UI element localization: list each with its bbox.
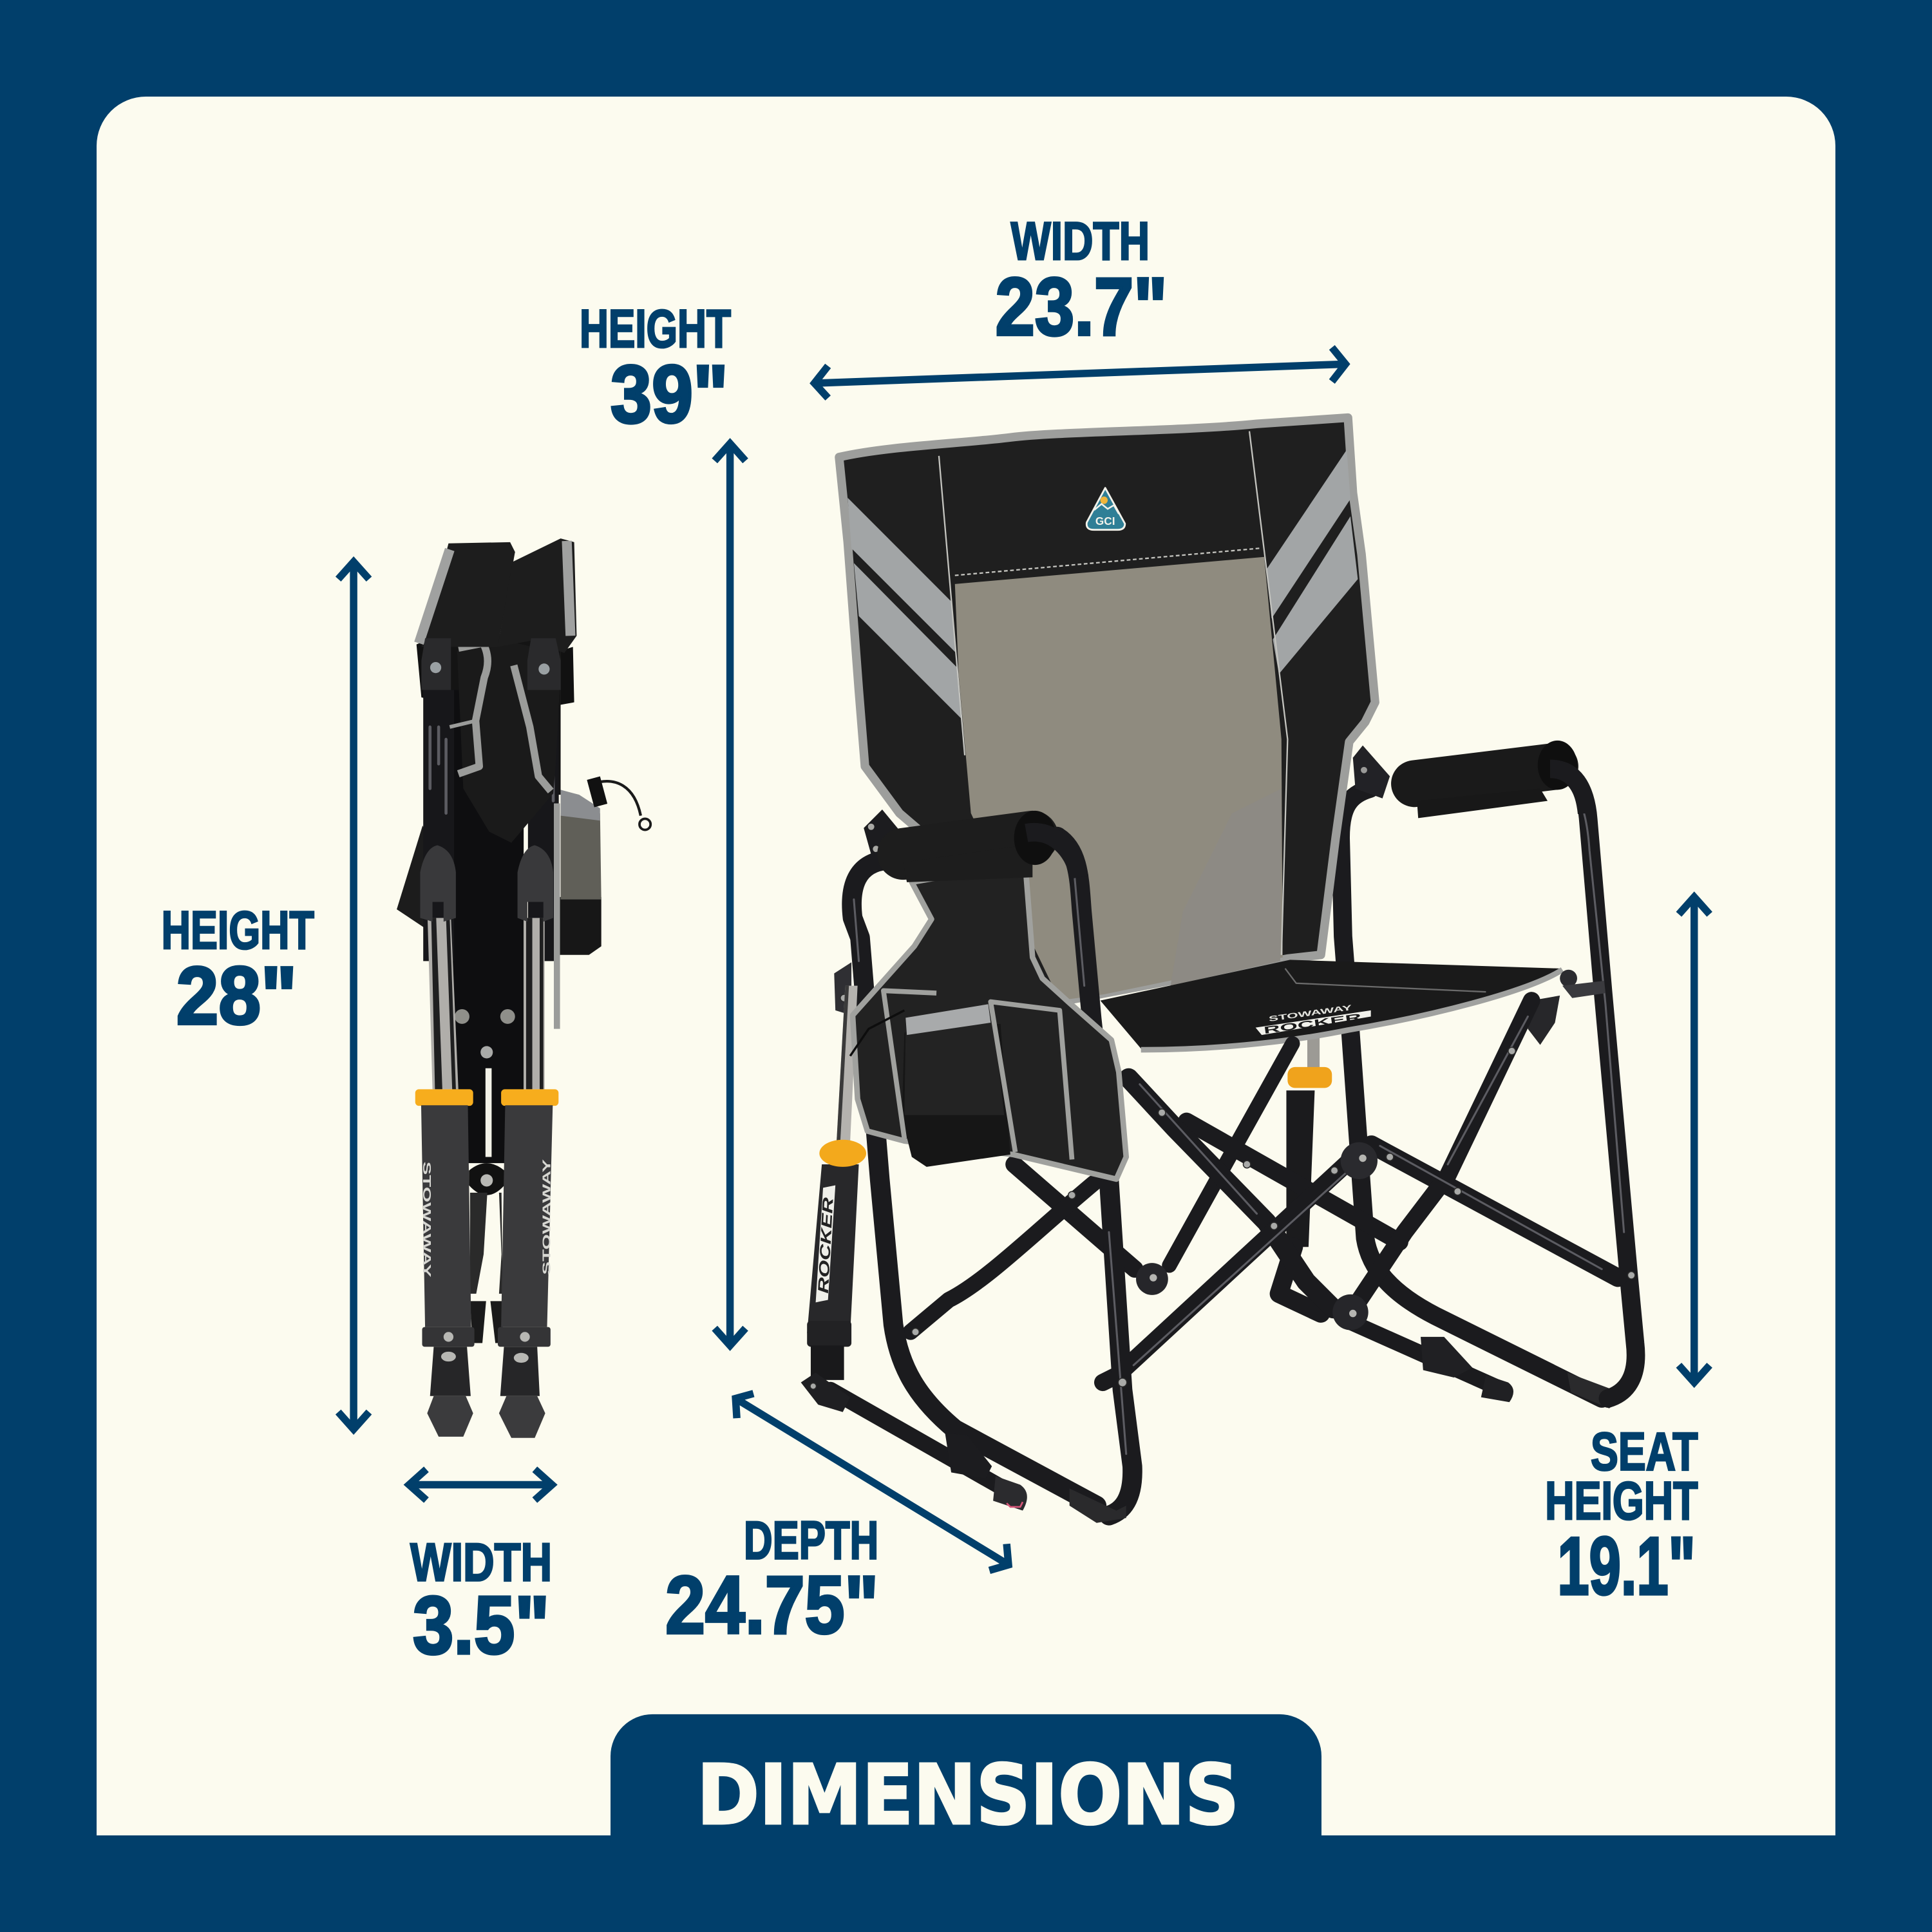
folded chair: left cylinder <box>421 1105 471 1327</box>
folded chair: tube highlights <box>430 727 553 813</box>
folded chair: right gray binding <box>567 541 571 636</box>
arrow: depth <box>735 1394 1009 1570</box>
label: top width <box>996 211 1168 352</box>
folded chair: right arched tube <box>535 690 551 961</box>
chair: seams <box>939 431 1287 955</box>
folded chair: right collar <box>498 1327 551 1347</box>
folded chair: right cylinder: STOWAWAY <box>540 1159 553 1275</box>
chair: front cylinder collar <box>807 1321 851 1347</box>
folded chair: left top fabric <box>421 542 515 647</box>
chair: seat fabric <box>1101 960 1560 1048</box>
heading: dimensions: DIMENSIONS <box>697 1748 1239 1844</box>
chair: back fabric with binding <box>839 418 1375 1004</box>
chair: right arm pad <box>1414 741 1587 818</box>
folded chair: left chrome tube <box>428 918 459 1089</box>
chair: pouch band <box>905 1004 990 1035</box>
value: depth: 24.75" <box>665 1559 878 1651</box>
chair: front right leg <box>1057 837 1132 1515</box>
folded chair: right yellow collar <box>501 1089 558 1106</box>
folded chair: left gray cap <box>420 845 456 922</box>
chair: right rear runner foot <box>1567 1372 1627 1408</box>
label: depth <box>665 1510 878 1651</box>
chair: seat corner knob and bracket <box>1528 970 1605 1045</box>
folded chair: left arched tube <box>431 690 447 961</box>
arrow: open height <box>715 444 746 1345</box>
chair: side organizer panel <box>853 862 1126 1179</box>
chair: frame bolts <box>912 1047 1635 1336</box>
chair: cup pouch <box>902 1024 1010 1167</box>
label: open height <box>580 299 731 440</box>
arrow: folded height <box>338 562 369 1429</box>
chair: right hinge <box>1353 746 1390 799</box>
chair: knob on leg <box>834 962 851 1016</box>
folded chair: right cylinder <box>501 1105 553 1327</box>
chair: front cylinder hinge and foot <box>801 1345 850 1412</box>
folded chair: center black frame <box>417 634 574 1343</box>
chair: rocker label: ROCKER <box>815 1197 837 1294</box>
folded chair: left chrome shade <box>431 918 456 1089</box>
folded chair: left collar <box>422 1327 475 1347</box>
chair: left reflective stripes <box>848 498 962 719</box>
label: depth: DEPTH <box>744 1510 878 1570</box>
chair: rocker label <box>815 1186 837 1302</box>
chair: yellow collar <box>819 1140 866 1167</box>
folded chair: left bracket <box>421 638 451 690</box>
chair: right reflective stripes <box>1267 450 1358 674</box>
chair: right tube highlight <box>1577 795 1624 1232</box>
folded chair: left cylinder: STOWAWAY <box>421 1162 433 1278</box>
folded chair: center fabric bundle <box>457 638 560 843</box>
chair: pocket strips <box>884 990 1072 1159</box>
folded chair: right foot <box>499 1396 545 1438</box>
label: seat height: HEIGHT <box>1545 1471 1698 1531</box>
chair: mesh moire tint <box>1171 788 1282 986</box>
chair: hub top <box>1341 1142 1378 1179</box>
chair: seat binding <box>1141 970 1562 1050</box>
label: top width: WIDTH <box>1011 211 1150 271</box>
folded chair: right chrome tube <box>524 918 545 1089</box>
folded chair: left yellow collar <box>415 1089 473 1106</box>
chair: leg bolt <box>1118 1378 1127 1387</box>
label: seat height: SEAT <box>1591 1422 1698 1482</box>
chair: pouch cord <box>850 1010 904 1056</box>
folded chair: gray straps <box>450 643 557 1029</box>
folded chair: right bracket <box>527 638 561 690</box>
value: seat height: 19.1" <box>1557 1520 1696 1612</box>
folded chair: rear flap <box>397 826 433 929</box>
chair: seat label: STOWAWAY <box>1268 1004 1353 1023</box>
chair: front foot bar <box>831 1390 1016 1496</box>
folded chair photo illustration <box>397 538 650 1438</box>
arrow: top width <box>815 348 1345 398</box>
panel: dimensions tab <box>611 1714 1321 1844</box>
chair: GCI logo: GCI <box>1095 515 1115 527</box>
arrow: folded width <box>409 1470 552 1500</box>
folded chair: right chrome shade <box>526 918 544 1089</box>
chair: front cylinder chrome rod <box>837 986 858 1141</box>
chair: seat label: ROCKER <box>1263 1012 1362 1036</box>
chair: hub rear <box>1136 1263 1168 1295</box>
label: folded width <box>410 1533 552 1671</box>
chair: seat label <box>1256 1004 1371 1036</box>
value: folded width: 3.5" <box>413 1580 549 1671</box>
chair: front cylinder body <box>807 1164 859 1333</box>
chair: right tube <box>1548 769 1636 1399</box>
arrow: seat height <box>1679 897 1710 1383</box>
chair: front runner foot <box>1070 1488 1126 1523</box>
value: folded height: 28" <box>176 950 297 1041</box>
folded chair: left gray binding <box>419 549 450 643</box>
chair: rear cylinder <box>1286 1035 1332 1247</box>
chair: frame highlights <box>1133 1016 1602 1365</box>
label: folded height <box>162 900 314 1041</box>
label: open height: HEIGHT <box>580 299 731 359</box>
chair: seat seam <box>1285 969 1486 992</box>
folded chair: right hinge <box>500 1347 540 1396</box>
folded chair: right top fabric <box>498 538 576 653</box>
chair: rear foot bar <box>1348 1321 1497 1387</box>
chair: cross frame bars <box>911 1001 1618 1383</box>
chair: rear hinge <box>1279 1247 1321 1314</box>
folded chair: left foot <box>427 1396 473 1437</box>
chair: rear foot cap and hinge <box>1421 1337 1513 1402</box>
label: folded width: WIDTH <box>410 1533 552 1593</box>
chair: front foot cap and hinge <box>945 1433 1027 1511</box>
folded chair: pouch <box>554 777 650 955</box>
chair: left arm pad <box>903 811 1079 882</box>
chair: front left leg and runner <box>852 860 1097 1506</box>
folded chair: left hinge <box>430 1347 471 1396</box>
chair: hub bottom <box>1332 1294 1368 1330</box>
label: folded height: HEIGHT <box>162 900 314 960</box>
chair: right rear tube and runner <box>1341 788 1602 1399</box>
chair: pouch mesh <box>904 1018 1004 1115</box>
label: seat height <box>1545 1422 1698 1612</box>
value: open height: 39" <box>611 348 728 440</box>
value: top width: 23.7" <box>996 261 1168 352</box>
folded chair: right gray cap <box>518 845 553 922</box>
chair: left hinge <box>864 810 905 862</box>
chair: leg highlights <box>854 875 1126 1454</box>
chair: GCI logo <box>1086 488 1125 530</box>
chair: mesh back panel <box>955 557 1283 1001</box>
rocking chair photo illustration <box>801 418 1636 1523</box>
